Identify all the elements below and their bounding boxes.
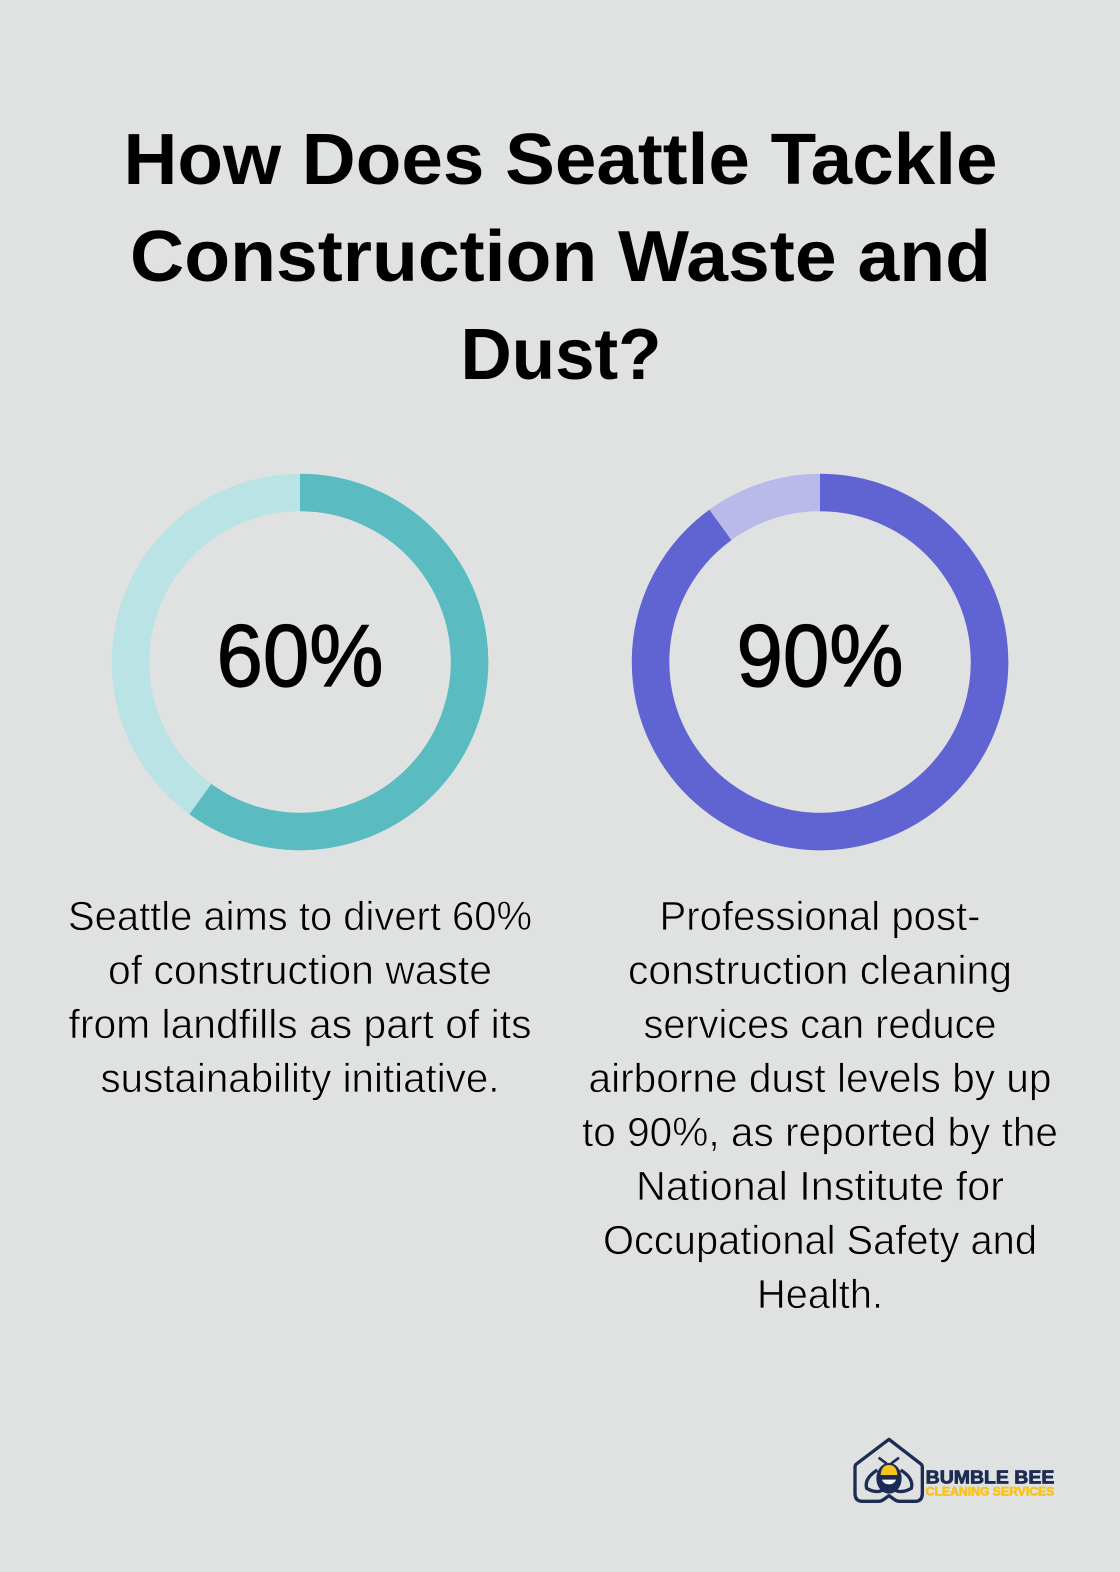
description: 60%: of construction waste (108, 947, 492, 993)
logo text: Cleaning Services: CLEANING SERVICES (926, 1486, 1055, 1499)
panel: 60% statistic (68, 492, 532, 1101)
description: 90%: to 90%, as reported by the (582, 1109, 1058, 1155)
description: 60%: Seattle aims to divert 60% (68, 893, 532, 939)
description: 60% (68, 893, 532, 1101)
value: 60%: 60% (216, 606, 384, 705)
logo text: Bumble Bee: BUMBLE BEE (926, 1466, 1054, 1487)
title (124, 120, 998, 395)
value: 90%: 90% (736, 606, 904, 705)
icon: house outline (855, 1439, 922, 1501)
description: 90%: National Institute for (636, 1163, 1004, 1209)
title: How Does Seattle Tackle (124, 120, 998, 200)
description: 90%: services can reduce (644, 1001, 996, 1047)
donut chart: 60% (130, 492, 470, 832)
logo: Bumble Bee Cleaning Services (855, 1439, 1055, 1501)
donut chart: 90% (650, 492, 990, 832)
description: 90%: Professional post- (660, 893, 980, 939)
description: 90%: Occupational Safety and (603, 1217, 1037, 1263)
description: 90% (582, 893, 1058, 1317)
description: 60%: sustainability initiative. (100, 1055, 500, 1101)
description: 90%: airborne dust levels by up (588, 1055, 1052, 1101)
panel: 90% statistic (582, 492, 1058, 1317)
description: 60%: from landfills as part of its (68, 1001, 532, 1047)
description: 90%: Health. (757, 1271, 883, 1317)
title: Construction Waste and (130, 217, 991, 297)
title: Dust? (460, 315, 662, 395)
icon: bee (866, 1458, 912, 1494)
description: 90%: construction cleaning (628, 947, 1012, 993)
